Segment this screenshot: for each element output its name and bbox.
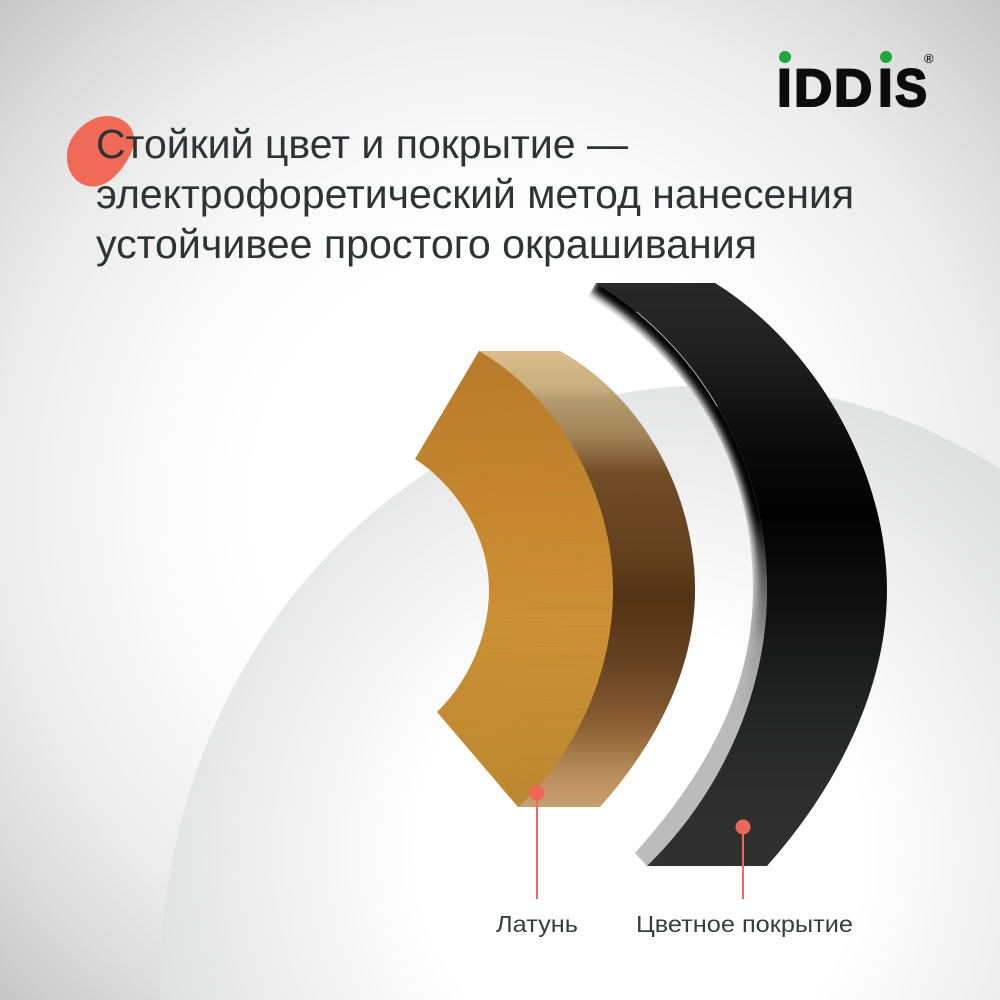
coating segment (580, 280, 887, 870)
marker: coating (736, 820, 750, 899)
background disc (160, 385, 1000, 1000)
logo: IDDIS: ® (924, 51, 934, 66)
title: Стойкий цвет и покрытие — (96, 121, 628, 167)
label: brass: Латунь (496, 911, 578, 937)
label: coating: Цветное покрытие (636, 911, 853, 937)
title (96, 121, 854, 267)
accent blob (67, 116, 134, 187)
brass segment (410, 345, 695, 815)
logo: IDDIS: S (895, 59, 927, 118)
marker: brass (530, 786, 544, 899)
title: электрофоретический метод нанесения (96, 171, 854, 217)
title: устойчивее простого окрашивания (96, 221, 757, 267)
logo: IDDIS: IDDI (777, 59, 893, 118)
logo: IDDIS (777, 51, 934, 118)
